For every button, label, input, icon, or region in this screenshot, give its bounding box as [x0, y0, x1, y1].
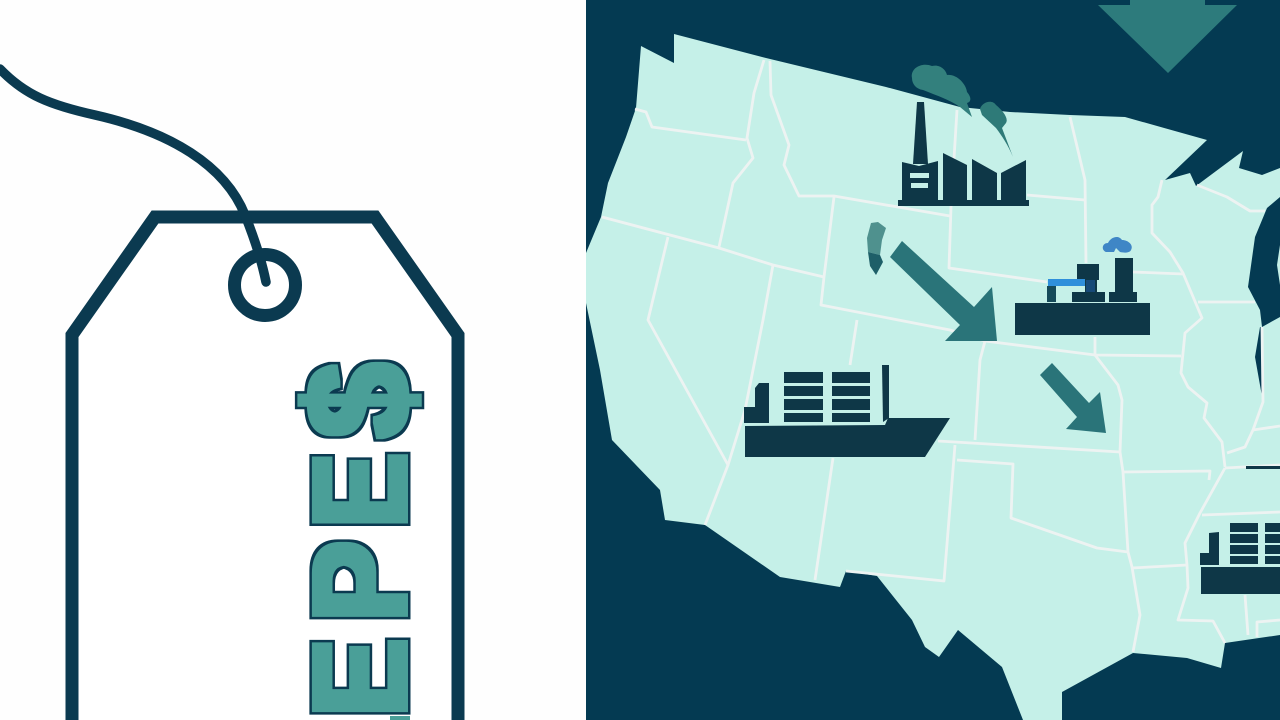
rotated tag text: $	[276, 363, 439, 438]
rotated tag text	[276, 363, 439, 717]
next letter fragment at bottom edge	[390, 716, 410, 720]
land mass	[586, 34, 1280, 720]
arrow: large diagonal arrow	[890, 241, 997, 341]
rotated tag text: P	[286, 541, 433, 622]
tag outline	[72, 217, 458, 720]
icon: factory	[898, 102, 1029, 206]
arrow: top down arrow	[1098, 0, 1237, 73]
icon: factory smoke large	[912, 65, 972, 117]
icon: cargo ship	[744, 365, 950, 457]
arrow: small diagonal arrow	[1040, 363, 1106, 433]
tag eyelet	[234, 254, 296, 316]
icon: wisp of smoke	[867, 222, 886, 275]
great lakes	[1248, 197, 1280, 402]
state borders	[602, 60, 1280, 652]
panel: map background	[586, 0, 1280, 720]
rotated tag text: E	[286, 453, 433, 528]
icon: power plant	[1015, 237, 1150, 335]
map of the United States	[586, 34, 1280, 720]
icon: second cargo ship	[1200, 466, 1280, 594]
icon: factory smoke small	[980, 102, 1013, 157]
panel: price tag	[0, 0, 586, 720]
rotated tag text: E	[287, 638, 433, 717]
tag string	[0, 69, 266, 282]
icon: blue cloud	[1103, 237, 1132, 253]
